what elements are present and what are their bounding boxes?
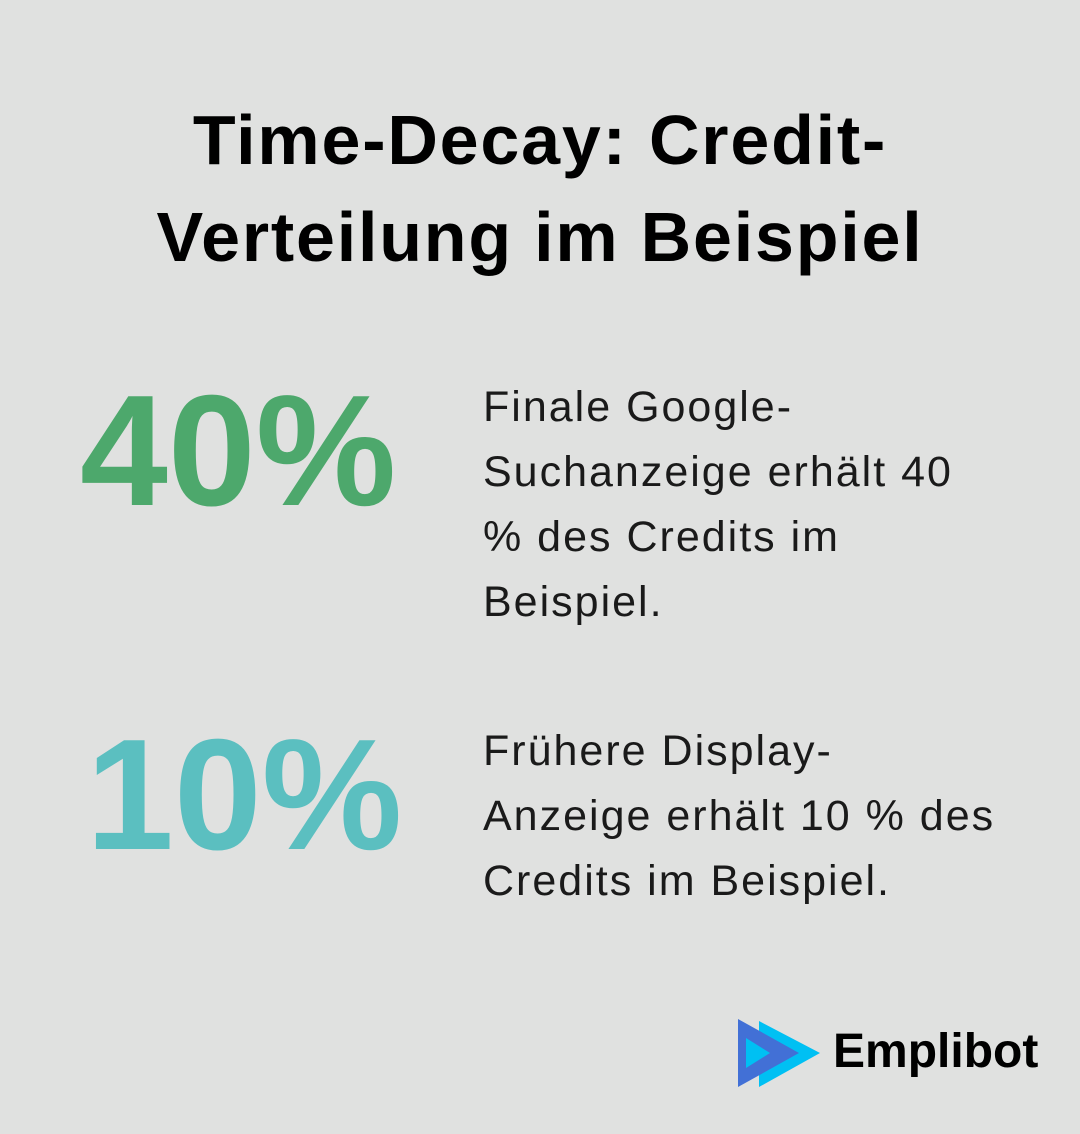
text: 10% description: Credits im Beispiel. <box>483 857 891 905</box>
text: 10% description: Frühere Display- <box>483 727 833 775</box>
text: 40% description: Beispiel. <box>483 578 664 626</box>
text: 10% description <box>483 727 995 905</box>
logo text: Emplibot <box>833 1025 1038 1078</box>
logo: Emplibot <box>738 1019 1038 1087</box>
title: Verteilung im Beispiel <box>156 198 924 276</box>
text: 40% description: Suchanzeige erhält 40 <box>483 448 953 496</box>
title <box>156 101 924 276</box>
text: 40% description <box>483 383 953 626</box>
title: Time-Decay: Credit- <box>193 101 887 179</box>
text: 40% description: Finale Google- <box>483 383 793 431</box>
stat: 40%: 40% <box>80 363 396 539</box>
icon: play triangles <box>738 1019 820 1087</box>
text: 10% description: Anzeige erhält 10 % des <box>483 792 995 840</box>
stat: 10%: 10% <box>86 707 402 883</box>
text: 40% description: % des Credits im <box>483 513 840 561</box>
